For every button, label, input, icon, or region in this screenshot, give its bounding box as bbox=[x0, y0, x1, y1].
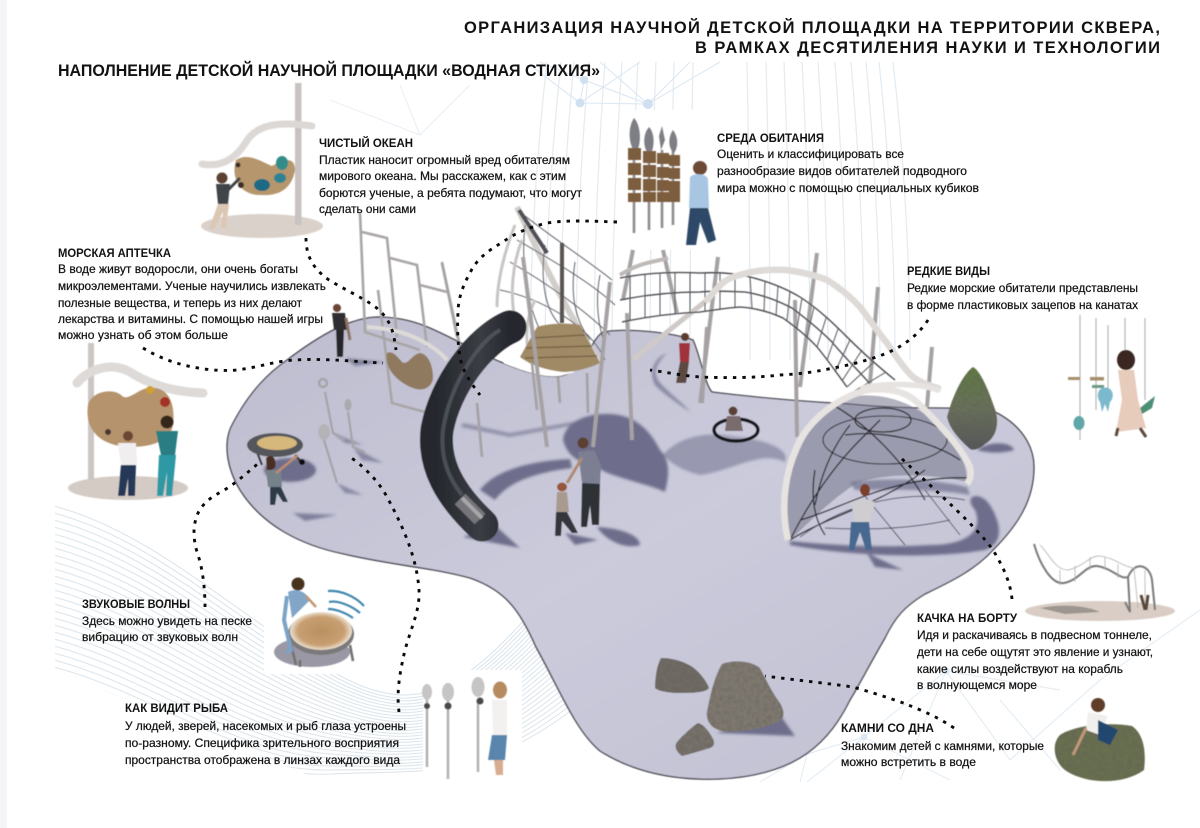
text block: fish vision: У людей, зверей, насекомых и рыб глаза устроены bbox=[125, 720, 406, 733]
support posts bbox=[442, 250, 932, 457]
main title: ОРГАНИЗАЦИЯ НАУЧНОЙ ДЕТСКОЙ ПЛОЩАДКИ НА ТЕРРИТОРИИ СКВЕРА, bbox=[464, 18, 1160, 37]
text block: rare species: РЕДКИЕ ВИДЫ bbox=[907, 264, 990, 278]
text block: clean ocean: Пластик наносит огромный вред обитателям bbox=[319, 154, 570, 167]
vignette: habitat cubes bbox=[628, 118, 716, 245]
vignette: tunnel model bbox=[1025, 544, 1175, 621]
text block: clean ocean: борются ученые, а ребята подумают, что могут bbox=[319, 187, 583, 200]
central shadow mass bbox=[563, 414, 668, 492]
text block: rare species: в форме пластиковых зацепов на канатах bbox=[907, 299, 1138, 312]
figure: father and child bbox=[555, 438, 601, 536]
text block: habitat bbox=[717, 131, 979, 195]
rack frames bbox=[360, 213, 457, 412]
text block: marine first aid: можно узнать об этом больше bbox=[58, 329, 228, 342]
left margin strip bbox=[0, 0, 7, 828]
connector: rare species bbox=[650, 320, 928, 378]
connector: clean ocean bbox=[306, 238, 396, 350]
connector: sound waves bbox=[194, 462, 260, 607]
arching net tunnel bbox=[620, 270, 938, 392]
text block: rare species bbox=[907, 264, 1138, 312]
vignette: rare species hanging ropes bbox=[1068, 315, 1155, 440]
text block: marine first aid: В воде живут водоросли, они очень богаты bbox=[58, 263, 298, 276]
background pattern: bottom right network bbox=[760, 610, 1200, 782]
text block: bottom stones bbox=[841, 721, 1044, 769]
lens poles in scene bbox=[318, 379, 365, 483]
white image backgrounds bbox=[264, 110, 720, 781]
background pattern: top network bbox=[330, 62, 720, 135]
figure: girl by dome bbox=[849, 484, 875, 550]
basket platform bbox=[520, 324, 600, 372]
vignette: marine first aid wall bbox=[68, 343, 203, 500]
text block: sound waves: вибрацию от звуковых волн bbox=[82, 631, 238, 644]
text block: sound waves: Здесь можно увидеть на песке bbox=[82, 615, 252, 628]
text block: habitat: Оценить и классифицировать все bbox=[717, 148, 904, 161]
main title: В РАМКАХ ДЕСЯТИЛЕНИЯ НАУКИ И ТЕХНОЛОГИИ bbox=[695, 39, 1160, 57]
text block: marine first aid: МОРСКАЯ АПТЕЧКА bbox=[58, 246, 171, 260]
text block: clean ocean bbox=[319, 135, 583, 216]
swing ring bbox=[714, 419, 758, 441]
text block: clean ocean: ЧИСТЫЙ ОКЕАН bbox=[319, 135, 413, 150]
text block: ship rocking: КАЧКА НА БОРТУ bbox=[917, 611, 1018, 625]
text block: marine first aid: лекарства и витамины. С помощью нашей игры bbox=[58, 313, 323, 326]
floor shadows bbox=[264, 353, 1014, 736]
background pattern: concentric arcs bbox=[530, 62, 910, 360]
main title bbox=[464, 18, 1160, 57]
text block: marine first aid bbox=[58, 246, 326, 342]
text block: fish vision bbox=[125, 701, 406, 767]
text block: marine first aid: полезные вещества, и теперь из них делают bbox=[58, 297, 303, 310]
vignette: sound table bbox=[274, 578, 364, 667]
dome floor shadow bbox=[790, 496, 999, 555]
text block: habitat: мира можно с помощью специальных кубиков bbox=[717, 182, 979, 195]
text block: habitat: СРЕДА ОБИТАНИЯ bbox=[717, 131, 824, 145]
text block: sound waves bbox=[82, 597, 252, 644]
text block: clean ocean: сделать они сами bbox=[319, 203, 416, 216]
main playground scene bbox=[227, 207, 1034, 779]
text block: fish vision: пространства отображена в линзах каждого вида bbox=[125, 754, 401, 767]
text block: rare species: Редкие морские обитатели представлены bbox=[907, 282, 1138, 295]
section heading: НАПОЛНЕНИЕ ДЕТСКОЙ НАУЧНОЙ ПЛОЩАДКИ «ВОДНАЯ СТИХИЯ» bbox=[58, 61, 600, 80]
text block: ship rocking: Идя и раскачиваясь в подвесном тоннеле, bbox=[917, 629, 1152, 642]
slide bbox=[436, 327, 510, 525]
text block: ship rocking: в волнующемся море bbox=[917, 679, 1037, 692]
floor tube bbox=[367, 327, 447, 360]
rocks bbox=[655, 658, 784, 756]
text block: bottom stones: можно встретить в воде bbox=[841, 756, 976, 769]
text block: marine first aid: микроэлементами. Ученые научились извлекать bbox=[58, 280, 326, 293]
text block: sound waves: ЗВУКОВЫЕ ВОЛНЫ bbox=[82, 597, 190, 611]
connector: ship rocking bbox=[900, 457, 1012, 599]
text block: fish vision: по-разному. Специфика зрительного восприятия bbox=[125, 737, 399, 750]
text block: fish vision: КАК ВИДИТ РЫБА bbox=[125, 701, 228, 715]
white gap under platform bbox=[503, 358, 575, 376]
connector: fish vision bbox=[350, 457, 419, 712]
text block: bottom stones: Знакомим детей с камнями, которые bbox=[841, 740, 1044, 753]
text block: ship rocking bbox=[917, 611, 1153, 692]
sand table in scene bbox=[247, 433, 305, 465]
mossy boulder bbox=[947, 367, 997, 450]
vignette: clean ocean wall bbox=[201, 83, 323, 238]
vignette: boy on stone bbox=[1055, 698, 1145, 781]
background pattern: sound waves bbox=[50, 505, 590, 774]
text block: ship rocking: какие силы воздействуют на корабль bbox=[917, 663, 1123, 676]
text block: clean ocean: мирового океана. Мы расскажем, как с этим bbox=[319, 170, 566, 183]
figure: adult on rack bbox=[332, 304, 350, 357]
wall palette in scene bbox=[387, 352, 433, 389]
text block: bottom stones: КАМНИ СО ДНА bbox=[841, 721, 934, 735]
dome net bbox=[784, 384, 971, 545]
text block: ship rocking: дети на себе ощутят это явление и узнают, bbox=[917, 646, 1153, 659]
figure: red kid bbox=[676, 333, 690, 383]
figure: kid on swing bbox=[725, 406, 743, 431]
connector: bottom stones bbox=[765, 676, 954, 728]
tall net bbox=[497, 207, 615, 368]
text block: habitat: разнообразие видов обитателей подводного bbox=[717, 165, 967, 178]
floor blob bbox=[227, 317, 1034, 779]
connector: habitat bbox=[458, 221, 617, 395]
connector: marine first aid bbox=[143, 348, 383, 370]
figure: kid at sand table bbox=[266, 455, 298, 505]
vignette: fish lenses bbox=[422, 677, 507, 779]
